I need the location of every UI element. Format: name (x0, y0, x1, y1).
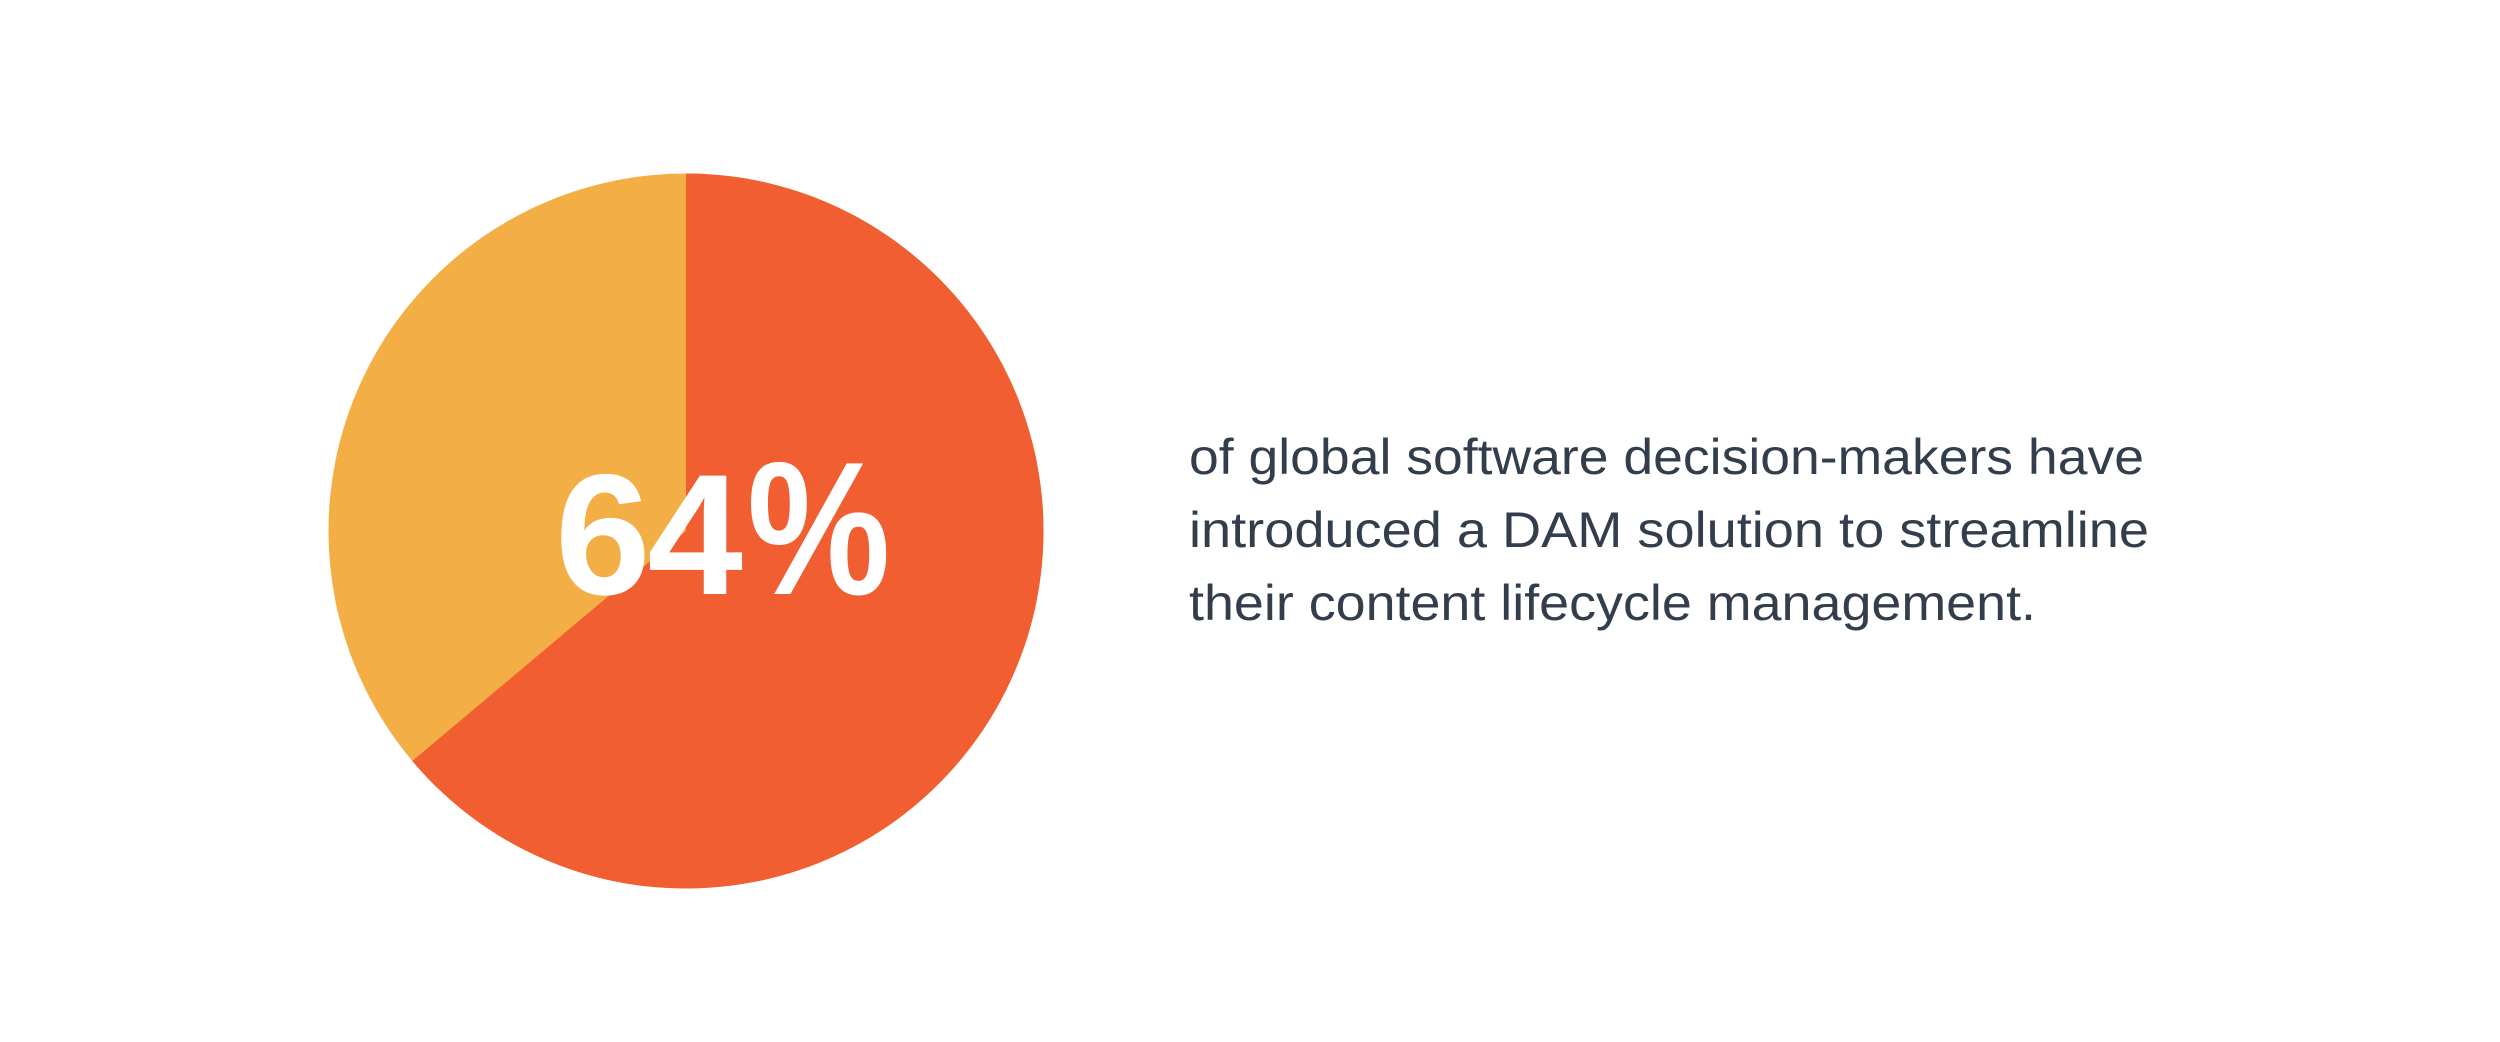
line 3: their content lifecycle management. (1189, 575, 2036, 631)
pie label: 64% (555, 424, 890, 635)
description text (1189, 429, 2149, 631)
pie chart (328, 174, 1044, 888)
digits: 64 (555, 439, 743, 631)
percent sign: % (747, 424, 890, 635)
pie slice: remainder (328, 174, 1044, 888)
line 1: of global software decision-makers have (1189, 429, 2144, 485)
line 2: introduced a DAM solution to streamline (1189, 502, 2149, 558)
pie slice: 64% (412, 174, 1043, 888)
